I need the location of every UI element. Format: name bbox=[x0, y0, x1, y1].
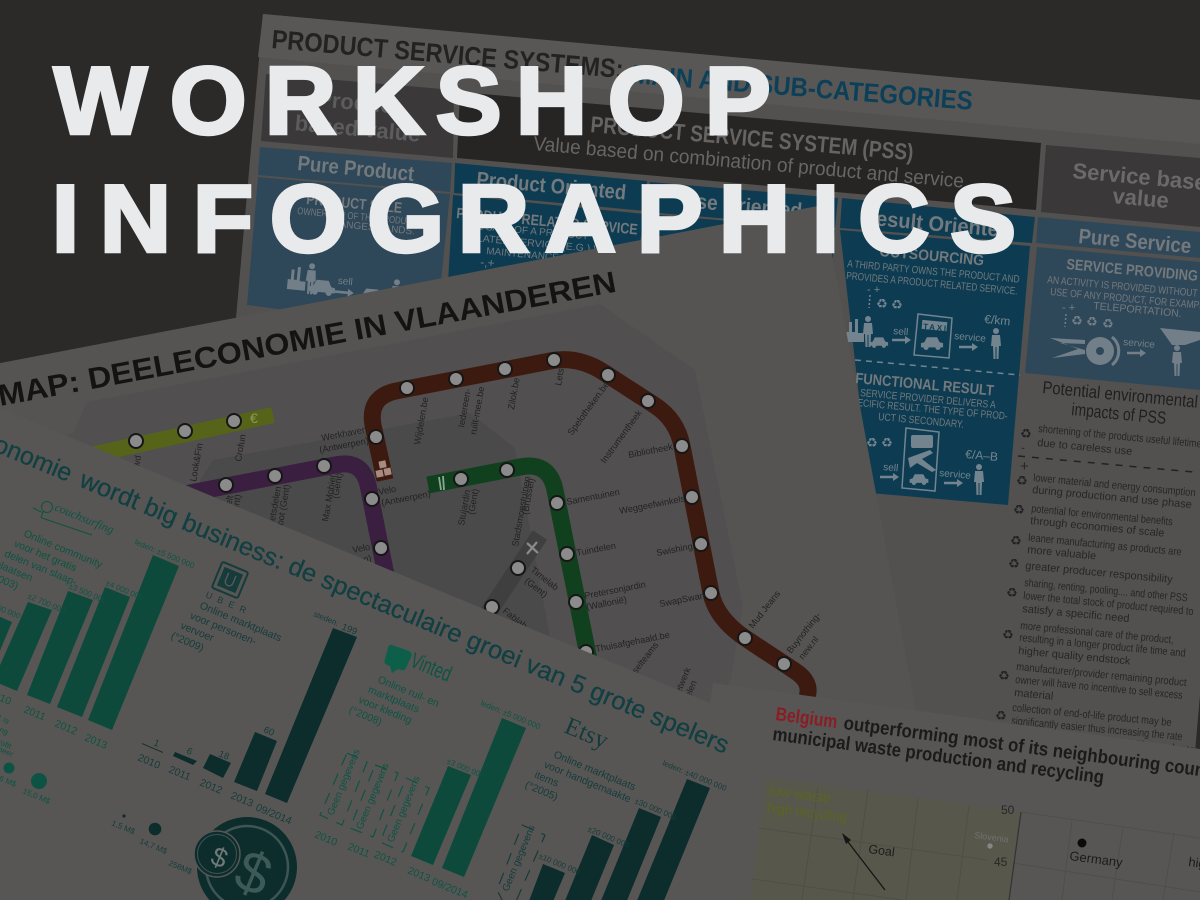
panel: result oriented: A THIRD PARTY OWNS THE PRODUCT AND bbox=[847, 258, 1020, 286]
text block: potential environmental impacts: - bbox=[1021, 442, 1026, 454]
panel: result oriented: SPECIFIC RESULT. THE TYPE OF PROD- bbox=[846, 396, 1009, 423]
icon: outsourcing chain: - + bbox=[867, 284, 880, 296]
chart: uber: 1,5 M$ bbox=[110, 819, 137, 836]
box: product service system bbox=[457, 92, 1041, 210]
title: workshop infographics: WORKSHOP bbox=[54, 47, 771, 154]
chart: uber: 199 bbox=[340, 622, 359, 638]
chart: vinted: Vinted bbox=[407, 648, 455, 687]
line: green food: Stadsmoestuinen bbox=[510, 476, 532, 547]
icon: outsourcing chain: ♻ bbox=[891, 298, 903, 313]
icon: functional result chain bbox=[866, 428, 999, 495]
chart: waste scatter plot: 45 bbox=[994, 855, 1008, 869]
line: brown reuse: Spelotheken.be bbox=[566, 380, 611, 437]
line: purple mobility: Fietsdelen bbox=[266, 486, 283, 529]
icon: functional result chain: service bbox=[939, 468, 972, 482]
panel: pure product: Pure Product bbox=[297, 152, 415, 186]
box: service based value bbox=[1041, 145, 1200, 227]
chart: uber: 14,7 M$ bbox=[138, 837, 169, 856]
chart: vinted: 2012 bbox=[372, 849, 399, 869]
text block: potential environmental impacts: higher quality endstock bbox=[1018, 645, 1131, 668]
text block: potential environmental impacts: more valuable bbox=[1027, 544, 1097, 562]
chart: uber: (°2009) bbox=[169, 630, 206, 654]
text block: potential environmental impacts: + bbox=[1020, 458, 1029, 475]
icon: outsourcing chain: ♻ bbox=[876, 297, 888, 312]
text block: potential environmental impacts: during production and use phase bbox=[1032, 484, 1192, 511]
line: brown reuse bbox=[318, 353, 823, 697]
panel: pure service: TELEPORTATION. bbox=[1093, 300, 1182, 320]
panel: result oriented: UCT IS SECONDARY. bbox=[878, 411, 964, 431]
line: green food bbox=[428, 463, 699, 720]
line: olive financing: € bbox=[250, 410, 258, 426]
line: purple mobility: Velt bbox=[222, 494, 235, 511]
chart: etsy: Etsy bbox=[561, 713, 613, 755]
icon: pure product sell chain: sell bbox=[337, 276, 353, 288]
text block: potential environmental impacts: potential for environmental benefits bbox=[1031, 503, 1174, 528]
chart: couchsurfing: 2013 bbox=[83, 732, 109, 752]
line: brown reuse: (Antwerpen) bbox=[318, 436, 370, 455]
line: purple mobility: Velo bbox=[351, 542, 371, 555]
chart: uber: voor personen- bbox=[188, 610, 259, 648]
line: brown reuse: Instrumentheek bbox=[599, 408, 644, 465]
chart: vinted bbox=[313, 645, 542, 900]
line: green food: Wisselteams bbox=[621, 640, 661, 687]
chart: couchsurfing: voor het gratis bbox=[12, 538, 78, 574]
text block: potential environmental impacts: due to careless use bbox=[1037, 437, 1133, 458]
line: green food: Thuisafgehaald.be bbox=[594, 630, 671, 654]
line: purple mobility: (Antwerpen) bbox=[380, 489, 432, 508]
line: olive financing: Crofun bbox=[233, 433, 248, 462]
line: green food: Pretersonjardin bbox=[583, 579, 647, 601]
icon: functional result chain: ♻ bbox=[881, 436, 893, 451]
chart: etsy: ±10 000 000 bbox=[537, 852, 582, 877]
panel: product oriented: Product Oriented bbox=[476, 168, 627, 205]
line: brown reuse: Mud Jeans bbox=[747, 588, 782, 630]
panel: result oriented: Result Oriented bbox=[861, 206, 1012, 243]
line: brown reuse: Bibliotheek bbox=[627, 441, 674, 460]
heading: belgium: Belgium bbox=[774, 704, 839, 733]
panel: product oriented bbox=[447, 163, 838, 300]
chart: waste scatter plot: Germany bbox=[1069, 848, 1124, 870]
chart: vinted: 2011 bbox=[346, 841, 371, 860]
panel: result oriented: PROVIDES A PRODUCT RELATED SERVICE. bbox=[846, 270, 1018, 298]
line: grey making: (Gent) bbox=[523, 576, 549, 600]
chart: uber: 2013 bbox=[229, 790, 255, 810]
panel: product oriented: Use Oriented bbox=[682, 189, 803, 223]
box: service based value: value bbox=[1112, 183, 1170, 213]
icon: recycling bullets: ♻ bbox=[1020, 427, 1032, 442]
icon: outsourcing chain: service bbox=[954, 331, 987, 345]
icon: tools bbox=[527, 542, 538, 554]
chart: couchsurfing: ±4 000 000 bbox=[104, 579, 145, 602]
line: brown reuse: Weggeefwinkels bbox=[618, 493, 686, 516]
line: green food: (Brussel) bbox=[520, 477, 536, 515]
text block: potential environmental impacts: material bbox=[1014, 687, 1054, 703]
icon: functional result chain: sell bbox=[883, 462, 899, 474]
line: grey making bbox=[470, 535, 560, 640]
chart: uber: 1 bbox=[152, 738, 161, 750]
line: olive financing: Crowd bbox=[129, 455, 143, 483]
line: purple mobility: Velo bbox=[377, 484, 397, 497]
arrow: goal bbox=[842, 833, 885, 890]
panel: product oriented: RELATED SERVICE (E.G.) WITH A bbox=[462, 232, 630, 258]
panel: pure service bbox=[1025, 217, 1200, 390]
text block: potential environmental impacts: through economies of scale bbox=[1030, 515, 1165, 540]
chart: vinted: leden: ±5 000 000 bbox=[479, 699, 542, 732]
title: workshop infographics bbox=[52, 47, 1016, 272]
chart: uber: UBER bbox=[204, 590, 253, 618]
heading: belgium bbox=[771, 704, 1200, 789]
chart: waste scatter plot: high recycling bbox=[767, 799, 848, 825]
icon: large dollar coin bbox=[194, 817, 297, 900]
chart: waste scatter plot: Slovenia bbox=[974, 830, 1009, 844]
line: green food: Buurtnetwerk bbox=[662, 666, 693, 720]
icon: couchsurfing logo: couchsurfing bbox=[53, 500, 116, 537]
icon: large dollar coin: $ bbox=[207, 841, 232, 874]
line: brown reuse: Wijdelen.be bbox=[412, 396, 430, 445]
icon: recycling bullets: ♻ bbox=[1006, 586, 1018, 601]
icon: functional result chain: €/A–B bbox=[965, 447, 999, 464]
panel: product oriented: PRODUCT RELATED SERVICE bbox=[456, 205, 638, 238]
panel: big business sheet bbox=[0, 401, 760, 900]
icon: boxes bbox=[376, 460, 392, 478]
chart: waste scatter plot bbox=[750, 777, 1200, 900]
panel: pure product: CHANGES HANDS. bbox=[325, 218, 415, 237]
line: purple mobility: Max Mobiel bbox=[320, 474, 338, 522]
box: product service system: Value based on combination of product and service bbox=[533, 133, 965, 193]
line: brown reuse: Zilok.be bbox=[506, 377, 522, 410]
line: green food: Stujardin bbox=[456, 489, 472, 526]
chart: uber: 6 bbox=[185, 746, 194, 758]
text block: potential environmental impacts: greater producer responsibility bbox=[1025, 560, 1174, 586]
heading: product service systems: MAIN AND SUB-CATEGORIES bbox=[631, 59, 974, 116]
chart: couchsurfing: Online community bbox=[22, 528, 104, 571]
chart: waste scatter plot: Goal bbox=[868, 842, 896, 859]
chart: vinted: Geen gegevens bbox=[355, 762, 392, 831]
chart: vinted: Geen gegevens bbox=[386, 775, 423, 844]
panel: product oriented: MAINTENANCE CONTRACT bbox=[486, 246, 617, 269]
icon: uber logo bbox=[212, 562, 248, 598]
chart: vinted: Geen gegevens bbox=[326, 748, 363, 817]
chart: couchsurfing: 2011 bbox=[22, 704, 47, 723]
chart: etsy: Geen gegevens bbox=[501, 824, 538, 893]
chart: etsy: leden: ±40 000 000 bbox=[661, 759, 728, 793]
icon: recycling bullets: ♻ bbox=[1016, 474, 1028, 489]
chart: etsy bbox=[497, 713, 728, 900]
line: brown reuse: ruilt-mee.be bbox=[468, 386, 486, 435]
chart: waste scatter plot: low waste bbox=[769, 782, 832, 806]
chart: etsy: ±30 000 000 bbox=[633, 797, 678, 822]
icon: recycling bullets: ♻ bbox=[1013, 503, 1025, 518]
text block: potential environmental impacts: of recycling of end-of-life products bbox=[1030, 729, 1196, 757]
line: brown reuse: new.nl bbox=[797, 635, 821, 661]
panel: result oriented bbox=[840, 198, 1035, 505]
icon: outsourcing chain bbox=[846, 284, 1011, 359]
line: purple mobility bbox=[185, 459, 432, 620]
chart: uber: Online marktplaats bbox=[198, 600, 283, 644]
icon: recycling bullets: ♻ bbox=[1008, 557, 1020, 572]
panel: product oriented: -,+ bbox=[480, 255, 495, 270]
text block: potential environmental impacts: collection of end-of-life product may be bbox=[1012, 702, 1172, 729]
chart: etsy: Online marktplaats bbox=[552, 749, 637, 793]
panel: pure product: PRODUCT SALE bbox=[306, 191, 403, 217]
line: purple mobility: Sabot (Gent) bbox=[273, 484, 292, 537]
panel: result oriented: SERVICE PROVIDER DELIVERS A bbox=[860, 387, 996, 411]
icon: vinted logo bbox=[384, 645, 412, 673]
panel: result oriented: FUNCTIONAL RESULT bbox=[855, 370, 995, 400]
icon: recycling bullets: ♻ bbox=[1010, 534, 1022, 549]
chart: vinted: ±3 000 000 bbox=[445, 757, 486, 780]
line: green food: Samentuinen bbox=[565, 487, 621, 507]
chart: couchsurfing bbox=[0, 500, 196, 806]
chart: couchsurfing: ±3 500 000 bbox=[67, 582, 108, 605]
chart: couchsurfing: leden: ±5 500 000 bbox=[133, 538, 196, 571]
line: olive financing: Look&Fin bbox=[188, 442, 205, 482]
line: purple mobility: (Gent) bbox=[229, 494, 243, 521]
chart: uber: 2011 bbox=[167, 764, 192, 783]
chart: vinted: 2013 bbox=[406, 865, 432, 885]
icon: teleportation chain bbox=[1050, 302, 1200, 376]
chart: couchsurfing: ±2 700 000 bbox=[26, 592, 67, 615]
heading: metro map: MAP: DEELECONOMIE IN VLAANDEREN bbox=[0, 266, 619, 413]
line: brown reuse: Iedereen- bbox=[456, 388, 473, 428]
text block: potential environmental impacts: impacts of PSS bbox=[1071, 399, 1167, 428]
panel: pure product: OWNERSHIP OF THE PRODUCT bbox=[297, 206, 417, 228]
line: green food: (Gent) bbox=[466, 488, 480, 515]
icon: recycling bullets: ♻ bbox=[998, 669, 1010, 684]
line: purple mobility: (Leuven) bbox=[335, 553, 372, 570]
chart: vinted: marktplaats bbox=[366, 684, 421, 716]
chart: uber: 60 bbox=[262, 725, 276, 739]
icon: pure product sell chain bbox=[286, 261, 403, 311]
panel: pure product bbox=[247, 147, 452, 330]
chart: uber: 2012 bbox=[198, 777, 224, 797]
chart: etsy: ±20 000 000 bbox=[586, 825, 631, 850]
line: brown reuse: Swishing bbox=[655, 541, 693, 558]
chart: uber: 2010 bbox=[136, 752, 162, 772]
line: brown reuse: Buynothing- bbox=[785, 610, 823, 655]
panel: metro map sheet bbox=[0, 205, 925, 760]
box: product service system: PRODUCT SERVICE SYSTEM (PSS) bbox=[590, 111, 915, 165]
chart: uber: 09/2014 bbox=[254, 802, 294, 827]
heading: product service systems: PRODUCT SERVICE SYSTEMS: bbox=[270, 24, 625, 84]
icon: teleportation chain: ♻ bbox=[1102, 317, 1114, 332]
icon: recycling bullets: ♻ bbox=[1002, 628, 1014, 643]
icon: teleportation chain: service bbox=[1123, 337, 1156, 351]
icon: cutlery bbox=[439, 476, 444, 490]
line: grey making: Fablab bbox=[501, 606, 529, 631]
chart: couchsurfing: delen van slaap- bbox=[3, 548, 79, 589]
chart: vinted: voor kleding bbox=[357, 694, 414, 727]
icon: outsourcing chain: sell bbox=[893, 326, 909, 338]
chart: waste scatter plot: 50 bbox=[1001, 803, 1015, 817]
chart: etsy: (°2005) bbox=[523, 779, 560, 803]
chart: uber: vervoer bbox=[179, 620, 216, 645]
icon: teleportation chain: - + bbox=[1062, 302, 1075, 314]
chart: uber bbox=[110, 562, 359, 900]
line: green food: (Wallonië) bbox=[585, 594, 628, 612]
line: brown reuse: SwapSwan bbox=[658, 590, 706, 609]
line: grey making: Timelab bbox=[529, 565, 560, 592]
chart: uber: 258M$ bbox=[167, 859, 194, 876]
icon: recycling bullets bbox=[995, 427, 1032, 724]
icon: teleportation chain: ♻ bbox=[1071, 314, 1083, 329]
chart: couchsurfing: 2012 bbox=[53, 718, 79, 738]
chart: vinted: Online ruil- en bbox=[376, 674, 441, 710]
heading: big business: wordt big business: de spectaculaire groei van 5 grote spelers bbox=[75, 465, 733, 759]
box: product based value bbox=[261, 74, 454, 158]
text block: potential environmental impacts: more professional care of the product, bbox=[1020, 620, 1174, 646]
chart: etsy: voor handgemaakte bbox=[542, 759, 633, 805]
icon: outsourcing chain: TAXI bbox=[923, 322, 947, 333]
line: green food: Tuindelen bbox=[575, 541, 617, 558]
heading: product service systems bbox=[270, 24, 974, 116]
panel: product service systems sheet bbox=[200, 14, 1200, 757]
chart: vinted: (°2008) bbox=[347, 704, 384, 728]
chart: uber: 18 bbox=[217, 749, 231, 763]
panel: product oriented: THE SALE OF A PRODUCT bbox=[463, 220, 589, 242]
line: brown reuse: Werkhaven bbox=[320, 424, 368, 443]
chart: vinted: 2010 bbox=[313, 829, 339, 849]
chart: etsy: items bbox=[533, 769, 560, 790]
panel: belgium waste sheet bbox=[710, 683, 1200, 900]
panel: result oriented: OUTSOURCING bbox=[879, 243, 985, 269]
line: olive financing bbox=[50, 410, 273, 483]
chart: uber: steden: bbox=[312, 610, 340, 628]
icon: teleportation chain: ♻ bbox=[1086, 315, 1098, 330]
chart: couchsurfing: 15,0 M$ bbox=[21, 787, 52, 806]
icon: recycling bullets: ♻ bbox=[995, 709, 1007, 724]
text block: potential environmental impacts: satisfy a specific need bbox=[1022, 603, 1130, 625]
line: purple mobility: (Gent) bbox=[330, 472, 344, 499]
text block: potential environmental impacts bbox=[995, 377, 1200, 757]
icon: outsourcing chain: €/km bbox=[984, 312, 1011, 328]
line: green food: Delen bbox=[680, 679, 699, 705]
box: product based value: Product bbox=[316, 86, 402, 119]
box: product based value: based value bbox=[294, 110, 422, 147]
line: brown reuse: Lets bbox=[553, 367, 566, 386]
title: workshop infographics: INFOGRAPHICS bbox=[52, 165, 1016, 272]
icon: functional result chain: ♻ bbox=[866, 436, 878, 451]
heading: belgium: municipal waste production and recycling bbox=[771, 724, 1105, 789]
